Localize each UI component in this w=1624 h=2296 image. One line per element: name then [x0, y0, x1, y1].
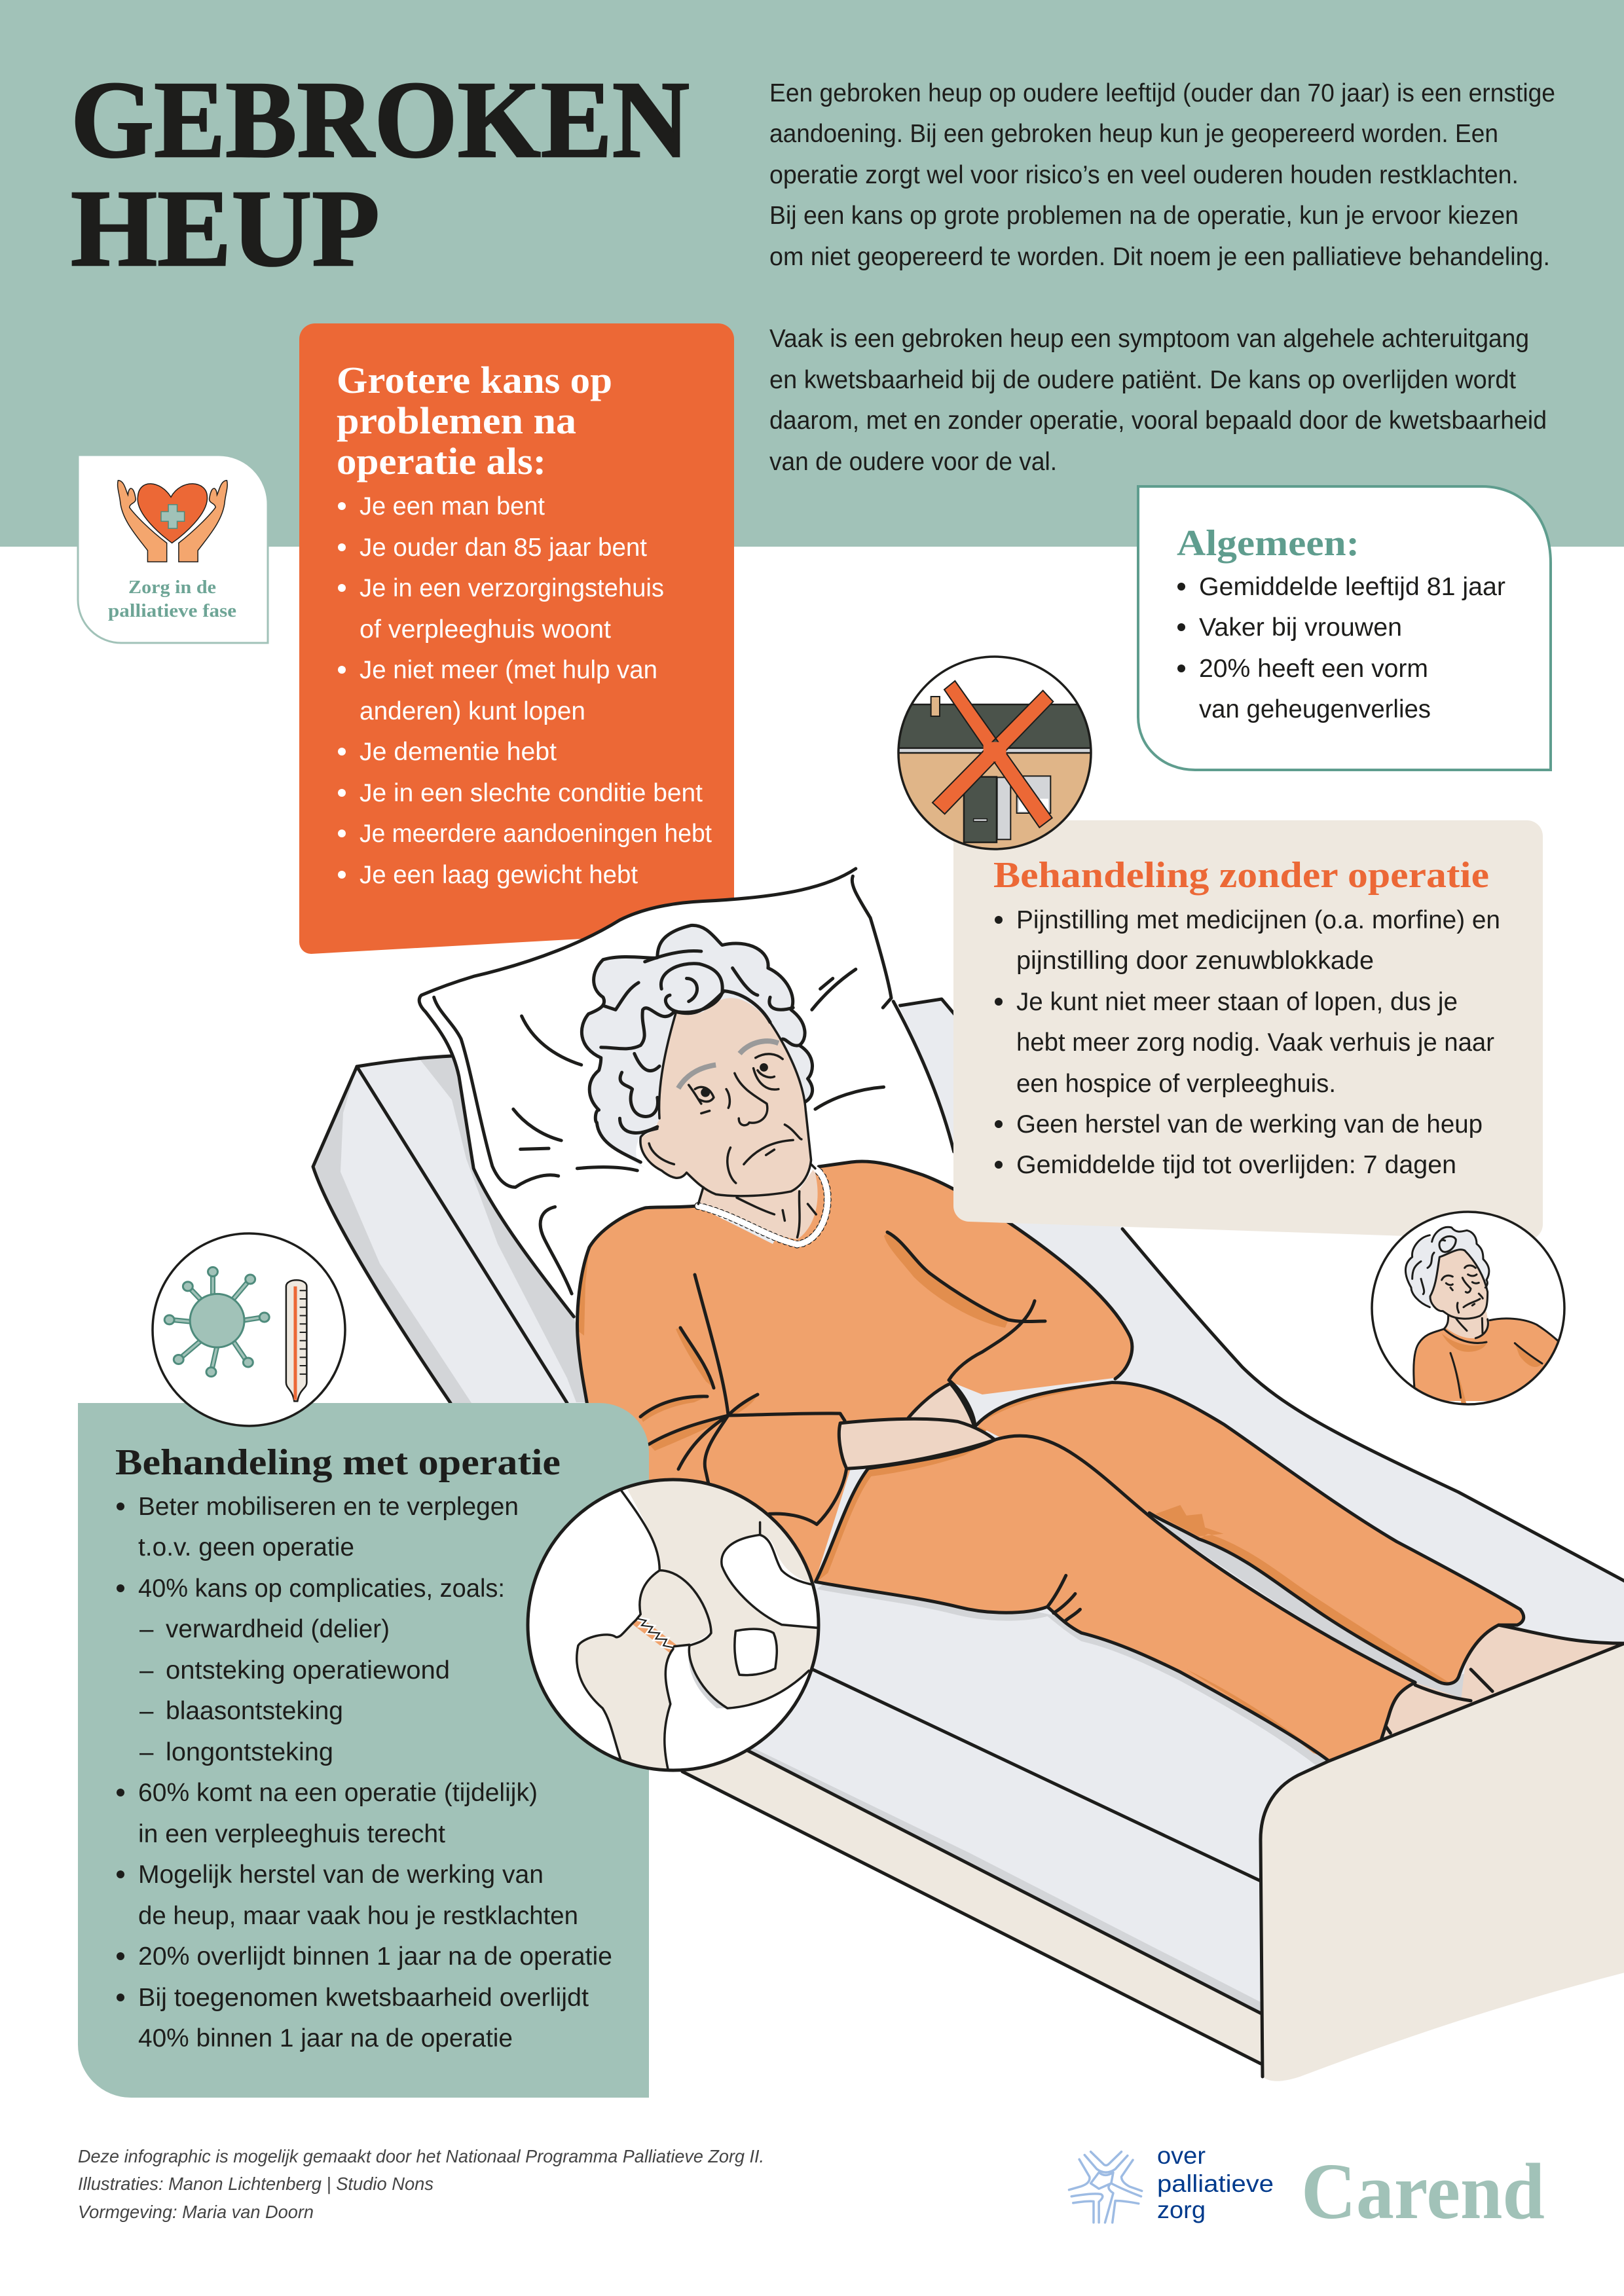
mattress sheet — [313, 999, 1624, 2013]
shadow under near leg — [817, 1570, 1335, 1768]
heading: grotere kans: operatie als: — [337, 440, 546, 483]
icon: house crossed out — [893, 657, 1094, 853]
list: met operatie: 20% overlijdt binnen 1 jaar na de operatie — [138, 1942, 612, 1971]
panel: behandeling zonder operatie — [953, 820, 1543, 1240]
list: met operatie: – — [139, 1656, 154, 1685]
femur — [577, 1620, 673, 1773]
list: met operatie: – — [139, 1697, 154, 1725]
badge: zorg in de palliatieve fase — [78, 455, 268, 643]
torso — [578, 1161, 1132, 1637]
far leg shading — [980, 1383, 1449, 1683]
small woman lines — [1405, 1227, 1557, 1398]
legs and arms — [769, 1383, 1624, 1768]
heading: grotere kans: Grotere kans op — [337, 359, 612, 401]
thermometer — [286, 1280, 306, 1401]
far hand — [908, 1383, 974, 1427]
credits: Deze infographic is mogelijk gemaakt door het Nationaal Programma Palliatieve Zorg II. — [78, 2146, 764, 2166]
far leg — [976, 1383, 1524, 1684]
heading: zonder operatie: Behandeling zonder operatie — [993, 855, 1489, 896]
pelvis shading — [676, 1576, 728, 1709]
illustration: bed — [313, 999, 1624, 2064]
illustration: woman head — [581, 925, 828, 1245]
list: risk factors — [338, 492, 712, 889]
list: zonder operatie: Pijnstilling met medicijnen (o.a. morfine) en — [1016, 906, 1500, 934]
list: zonder operatie: Geen herstel van de werking van de heup — [1016, 1110, 1483, 1139]
icon: virus and thermometer — [153, 1233, 345, 1426]
list: met operatie: ontsteking operatiewond — [166, 1656, 450, 1685]
title — [71, 59, 690, 289]
heading: met operatie: Behandeling met operatie — [115, 1442, 561, 1483]
list: met operatie: longontsteking — [166, 1738, 333, 1766]
header band — [0, 0, 1624, 547]
obturator opening — [736, 1630, 775, 1674]
list: met operatie: in een verpleeghuis terecht — [138, 1820, 445, 1848]
intro text: daarom, met en zonder operatie, vooral bepaald door de kwetsbaarheid — [769, 407, 1547, 435]
list: zonder operatie: Gemiddelde tijd tot overlijden: 7 dagen — [1016, 1151, 1456, 1179]
list: met operatie: 40% binnen 1 jaar na de operatie — [138, 2024, 513, 2052]
list: risk factors: Je ouder dan 85 jaar bent — [360, 534, 647, 562]
icon: sleeping woman — [1372, 1212, 1564, 1406]
intro text: van de oudere voor de val. — [769, 448, 1057, 476]
list: risk factors: Je een laag gewicht hebt — [360, 861, 638, 889]
torso lines — [578, 1161, 1132, 1493]
eyebrows — [678, 1041, 779, 1088]
illustration: footboard — [1261, 1643, 1624, 2081]
list: met operatie: – — [139, 1615, 154, 1643]
list: met operatie — [117, 1493, 612, 2052]
list: met operatie: Bij toegenomen kwetsbaarheid overlijdt — [138, 1984, 589, 2012]
list: risk factors: of verpleeghuis woont — [360, 615, 611, 644]
logo: star — [1069, 2152, 1142, 2223]
list: met operatie: t.o.v. geen operatie — [138, 1533, 354, 1561]
list: met operatie: – — [139, 1738, 154, 1766]
small torso — [1413, 1319, 1559, 1401]
panel: behandeling met operatie — [78, 1403, 649, 2098]
eyes — [701, 1088, 710, 1097]
virus — [164, 1267, 269, 1377]
list: algemeen — [1177, 573, 1505, 723]
list: algemeen: Gemiddelde leeftijd 81 jaar — [1199, 573, 1505, 601]
badge label: palliatieve fase — [108, 600, 236, 621]
list: risk factors: Je niet meer (met hulp van — [360, 656, 657, 684]
list: zonder operatie: een hospice of verpleeghuis. — [1016, 1070, 1336, 1098]
icon: hip fracture — [526, 1478, 820, 1772]
list: zonder operatie: pijnstilling door zenuwblokkade — [1016, 947, 1374, 975]
logo: carend: Carend — [1301, 2147, 1545, 2236]
near leg shading — [817, 1440, 1325, 1758]
near foot — [1381, 1683, 1477, 1743]
intro text: Bij een kans op grote problemen na de operatie, kun je ervoor kiezen — [769, 202, 1519, 230]
forearm — [839, 1419, 995, 1468]
intro text: Vaak is een gebroken heup een symptoom van algehele achteruitgang — [769, 325, 1529, 353]
near leg — [815, 1436, 1415, 1760]
heading: algemeen: Algemeen: — [1177, 523, 1359, 564]
collar — [698, 1169, 828, 1245]
list: risk factors: Je in een slechte conditie bent — [360, 779, 703, 807]
small face — [1431, 1250, 1486, 1313]
intro text: operatie zorgt wel voor risico’s en veel ouderen houden restklachten. — [769, 161, 1519, 189]
small neck — [1445, 1309, 1488, 1338]
small torso shading — [1442, 1334, 1542, 1406]
credits: Illustraties: Manon Lichtenberg | Studio Nons — [78, 2174, 434, 2194]
list: risk factors: Je in een verzorgingstehuis — [360, 574, 664, 602]
leg gap shadow — [1149, 1513, 1492, 1704]
credits — [78, 2146, 764, 2222]
panel: algemeen — [1138, 486, 1551, 770]
illustration: pillow — [419, 869, 954, 1331]
heading: grotere kans — [337, 359, 612, 483]
logo: over palliatieve zorg: over — [1157, 2142, 1206, 2169]
intro text: en kwetsbaarheid bij de oudere patiënt. De kans op overlijden wordt — [769, 366, 1516, 394]
icon: hands holding heart — [118, 481, 227, 562]
list: met operatie: Beter mobiliseren en te verplegen — [138, 1493, 519, 1521]
badge label: Zorg in de — [128, 577, 216, 598]
intro text — [769, 79, 1555, 476]
illustration: woman body — [578, 1161, 1624, 1768]
torso shading — [579, 1232, 1113, 1451]
list: risk factors: Je een man bent — [360, 492, 545, 520]
intro text: Een gebroken heup op oudere leeftijd (ouder dan 70 jaar) is een ernstige — [769, 79, 1555, 107]
title: HEUP — [71, 168, 380, 289]
leg lines — [769, 1383, 1624, 1760]
pelvis — [627, 1481, 817, 1707]
title: GEBROKEN — [71, 59, 690, 181]
face — [640, 991, 811, 1196]
intro text: aandoening. Bij een gebroken heup kun je geopereerd worden. Een — [769, 120, 1498, 148]
list: met operatie: blaasontsteking — [166, 1697, 343, 1725]
list: risk factors: Je dementie hebt — [360, 738, 557, 766]
list: met operatie: 60% komt na een operatie (tijdelijk) — [138, 1779, 538, 1807]
upper opening — [723, 1536, 817, 1626]
list: algemeen: Vaker bij vrouwen — [1199, 613, 1402, 642]
list: zonder operatie — [995, 906, 1500, 1179]
list: met operatie: Mogelijk herstel van de werking van — [138, 1861, 544, 1889]
list: met operatie: verwardheid (delier) — [166, 1615, 390, 1643]
neck — [697, 1169, 818, 1239]
list: risk factors: Je meerdere aandoeningen hebt — [360, 820, 712, 848]
mattress shading — [313, 1054, 1261, 2013]
fracture — [637, 1620, 673, 1649]
small hair — [1405, 1227, 1489, 1307]
hair — [581, 925, 813, 1169]
bed lines — [313, 999, 1624, 2064]
logo: over palliatieve zorg — [1157, 2142, 1274, 2223]
list: met operatie: de heup, maar vaak hou je restklachten — [138, 1902, 578, 1930]
list: algemeen: 20% heeft een vorm — [1199, 655, 1428, 683]
list: zonder operatie: hebt meer zorg nodig. Vaak verhuis je naar — [1016, 1029, 1494, 1057]
logo: over palliatieve zorg: palliatieve — [1157, 2170, 1274, 2197]
badge label — [108, 577, 236, 621]
far foot — [1458, 1625, 1624, 1722]
heading: grotere kans: problemen na — [337, 399, 576, 442]
intro text: om niet geopereerd te worden. Dit noem je een palliatieve behandeling. — [769, 243, 1550, 271]
credits: Vormgeving: Maria van Doorn — [78, 2202, 314, 2222]
hair lines — [581, 925, 813, 1162]
list: met operatie: 40% kans op complicaties, zoals: — [138, 1575, 505, 1603]
femoral head — [640, 1571, 710, 1645]
list: risk factors: anderen) kunt lopen — [360, 697, 585, 725]
bone lines — [577, 1491, 820, 1773]
bed base — [682, 1751, 1261, 2064]
list: zonder operatie: Je kunt niet meer staan of lopen, dus je — [1016, 988, 1458, 1016]
face lines — [640, 1012, 816, 1237]
logo: over palliatieve zorg: zorg — [1157, 2196, 1206, 2223]
list: algemeen: van geheugenverlies — [1199, 695, 1431, 723]
panel: grotere kans op problemen — [299, 323, 734, 954]
